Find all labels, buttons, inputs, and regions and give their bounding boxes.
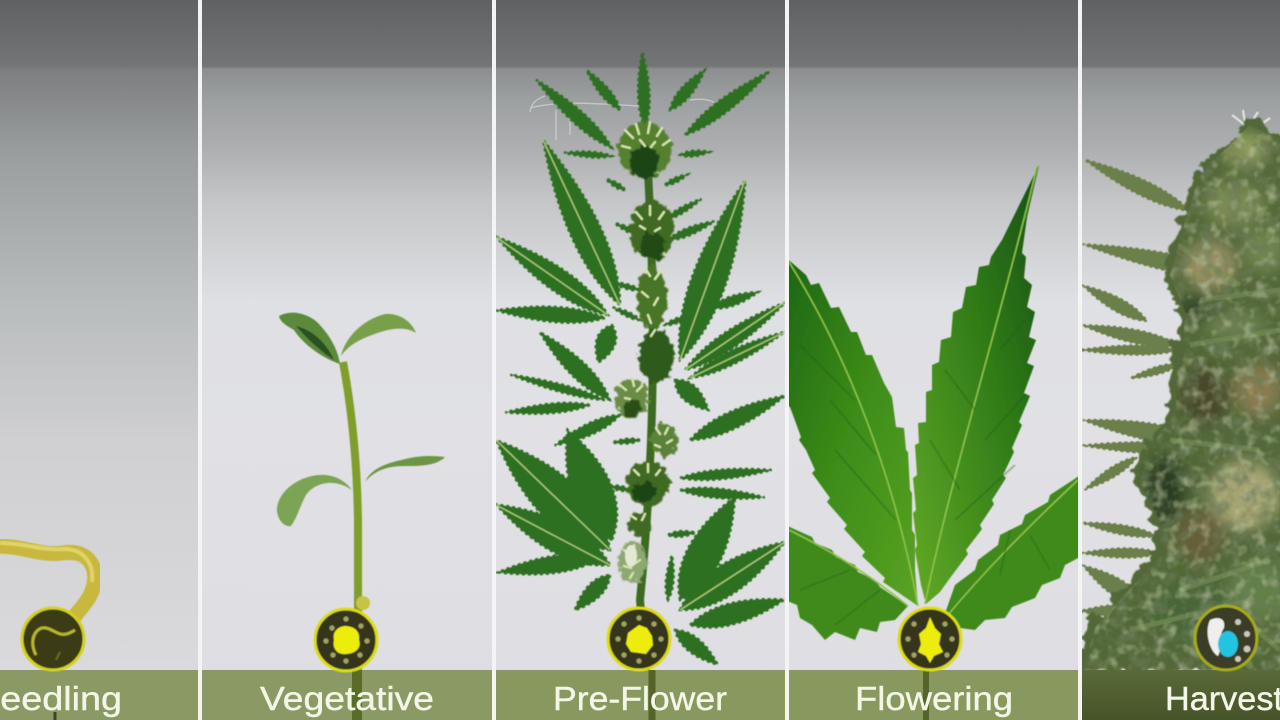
- leaf: big left: [785, 258, 918, 606]
- leaf veins: [789, 167, 1078, 622]
- white tip hairs: [1232, 110, 1270, 128]
- icon: pre-flower badge: [608, 608, 670, 670]
- leaf: top left: [279, 313, 340, 364]
- bud silhouette: [1075, 118, 1280, 672]
- panel: pre-flower: [481, 0, 793, 720]
- lower stem: [648, 670, 656, 720]
- bud leaf strokes: [1130, 190, 1280, 650]
- seedling sprout: [0, 543, 95, 620]
- icon: harvest badge: [1195, 606, 1257, 670]
- panel: vegetative: [202, 0, 492, 720]
- large serrated leaves: [785, 165, 1082, 640]
- label: vegetative: Vegetative: [260, 680, 434, 717]
- leaf: center: [913, 165, 1039, 604]
- leaf: lower right: [942, 474, 1082, 630]
- pale bud flecks: [620, 122, 672, 578]
- leaf: lower left: [277, 475, 352, 526]
- label band: flowering: [789, 670, 1078, 720]
- leaf: lower right: [365, 456, 445, 482]
- label band: pre-flower: [496, 670, 785, 720]
- mature flowering bud: [1075, 110, 1280, 675]
- lower stem: [352, 670, 362, 720]
- vegetative seedling plant: [276, 312, 446, 670]
- icon: seedling badge: [22, 608, 84, 670]
- panel: flowering: [785, 0, 1082, 720]
- leaves right: [664, 175, 793, 671]
- short bracts around the buds: [605, 172, 716, 538]
- bud shadow texture: [1082, 110, 1280, 675]
- pale lower bud highlight: [625, 545, 637, 567]
- top spikes: [532, 52, 774, 159]
- leaf: top right: [341, 314, 416, 356]
- panel: harvest: [1075, 0, 1280, 720]
- stem bud: [356, 596, 370, 610]
- leaf: lower left: [785, 525, 908, 640]
- long sugar leaves: [1079, 153, 1249, 648]
- label: flowering: Flowering: [855, 680, 1013, 717]
- flowering plant with serrated leaves: [496, 52, 785, 670]
- stem: [343, 362, 358, 720]
- seedling root: [54, 712, 56, 720]
- label band: vegetative: [202, 670, 492, 720]
- icon: flowering badge: [899, 608, 961, 670]
- bud highlight texture: [1082, 110, 1280, 675]
- stem: [923, 668, 929, 720]
- leaf midribs: [496, 140, 785, 610]
- label band: seedling: [0, 670, 198, 720]
- bud clusters: [615, 122, 678, 584]
- panel: seedling: [0, 0, 198, 720]
- icon: vegetative badge: [315, 609, 377, 671]
- leaves left: [481, 134, 634, 616]
- wispy hairs: [530, 96, 716, 140]
- label band: harvest: [1082, 670, 1280, 720]
- bud colour patches and texture: [1082, 110, 1280, 675]
- label: pre-flower: Pre-Flower: [553, 680, 727, 717]
- main stem: [640, 150, 653, 720]
- label: harvest: Harvest: [1165, 680, 1280, 717]
